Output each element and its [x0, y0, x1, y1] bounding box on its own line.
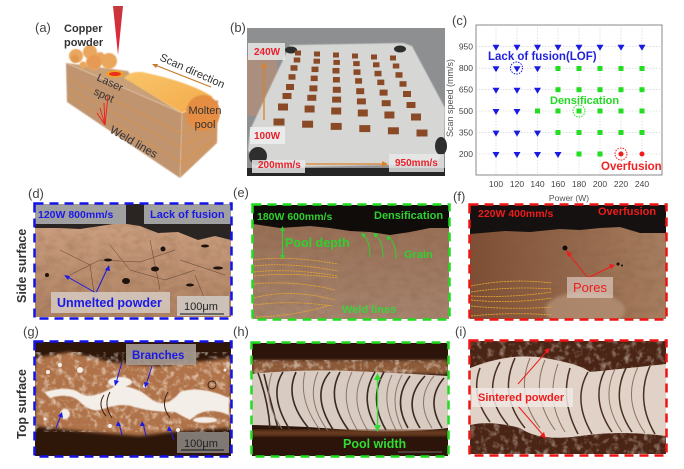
highlight circles: [510, 62, 627, 160]
power arrow: [263, 66, 265, 120]
x axis ticks: 200: [593, 179, 607, 189]
micro scale bar: [398, 451, 442, 453]
pointer arrows: [518, 351, 547, 435]
plate holes: [249, 46, 447, 165]
pool width label: Pool width: [343, 437, 406, 451]
x axis title: Power (W): [549, 193, 589, 203]
speed arrow: [306, 163, 383, 165]
laser beam: [113, 6, 123, 55]
dashed frame: [470, 340, 666, 456]
molten pool: [186, 95, 220, 131]
lack of fusion label: Lack of fusion(LOF): [488, 51, 597, 63]
green markers: densification: [535, 66, 644, 156]
powder label: powder: [64, 37, 104, 49]
panel: i sintered powder top surface: Sintered powder: [478, 392, 565, 404]
panel: d lack of fusion micrograph: Unmelted powder: [57, 296, 162, 310]
dashed frame: [34, 204, 232, 318]
printed samples: [274, 50, 428, 136]
x axis ticks: 220: [614, 179, 628, 189]
speed max label: [389, 154, 444, 172]
y axis ticks: 650: [459, 85, 473, 95]
dashed frame: [252, 204, 450, 320]
label g: (g): [23, 324, 39, 339]
panel: f overfusion micrograph: [453, 189, 666, 328]
state tag: [144, 204, 231, 224]
panel: h pool width top surface: [233, 324, 448, 456]
panel: g branches top surface: [23, 324, 232, 456]
micrograph: [35, 342, 231, 456]
panel: i sintered powder top surface: [455, 324, 666, 456]
weld lines label: Weld lines: [108, 124, 159, 161]
powder label: Copper: [64, 23, 103, 35]
condition text: 180W 600mm/s: [257, 211, 332, 223]
laser spot: [106, 70, 124, 78]
y axis ticks: [459, 42, 473, 159]
label f: (f): [453, 189, 465, 204]
speed min label: [252, 160, 305, 173]
base plate: [248, 43, 445, 168]
x axis ticks: 160: [551, 179, 565, 189]
state text: Overfusion: [598, 206, 656, 218]
x axis ticks: 100: [489, 179, 503, 189]
dashed frame: [252, 342, 448, 456]
label d: (d): [28, 186, 44, 201]
pool depth arrow: [282, 230, 284, 257]
grain arrows: [363, 235, 396, 259]
grain label: Grain: [404, 249, 433, 261]
micrograph: [252, 343, 448, 456]
pool depth label: Pool depth: [285, 236, 350, 250]
axes frame: [476, 25, 662, 175]
row label: top surface: Top surface: [15, 369, 29, 439]
y axis ticks: 800: [459, 63, 473, 73]
power max label: [248, 43, 285, 60]
label b: (b): [230, 20, 246, 35]
label a: (a): [35, 20, 51, 35]
scan arrow: [155, 65, 211, 87]
panel: b sample photograph: 100W: [254, 131, 281, 142]
y axis ticks: 950: [459, 42, 473, 52]
copper powder: [69, 45, 117, 70]
label h: (h): [233, 324, 249, 339]
condition tag: [35, 204, 126, 224]
molten pool label: Molten: [188, 105, 222, 117]
weld line traces: [254, 258, 338, 317]
weld line strokes: [67, 78, 217, 162]
label e: (e): [233, 185, 249, 200]
weld lines label: Weld lines: [342, 304, 396, 316]
scale bar: [177, 432, 229, 453]
pointer arrows: [66, 267, 108, 293]
x axis ticks: 240: [635, 179, 649, 189]
y axis title: Scan speed (mm/s): [445, 59, 455, 137]
micrograph: [253, 205, 449, 319]
panel: b sample photograph: 200mm/s: [258, 160, 301, 171]
sintered powder tag: [472, 388, 573, 407]
weld line traces: [471, 281, 552, 316]
unmelted powder tag: [51, 292, 170, 313]
block front face: [66, 63, 182, 178]
scale bar: [177, 296, 229, 316]
y axis ticks: 200: [459, 149, 473, 159]
panel: g branches top surface: Branches: [132, 350, 184, 362]
label i: (i): [455, 324, 467, 339]
table background: [247, 28, 445, 176]
branches tag: [126, 344, 196, 365]
pool width arrow: [376, 378, 378, 428]
block top face molten: [124, 72, 213, 113]
panel: a laser process schematic: [35, 6, 226, 178]
x axis ticks: 180: [572, 179, 586, 189]
panel: b sample photograph: [230, 20, 447, 176]
dashed frame: [34, 342, 232, 456]
y axis ticks: 350: [459, 128, 473, 138]
label c: (c): [452, 13, 467, 28]
micrograph: [470, 205, 666, 328]
panel: e densification micrograph: [233, 185, 450, 320]
panel: b sample photograph: 950mm/s: [395, 158, 438, 169]
panel: d lack of fusion micrograph: [28, 186, 232, 318]
x axis ticks: 120: [510, 179, 524, 189]
panel: b sample photograph: 240W: [254, 47, 281, 58]
micrograph: [35, 204, 231, 317]
panel: g branches top surface: 100μm: [184, 438, 218, 450]
laser text: Laser: [95, 72, 125, 94]
panel: f overfusion micrograph: Pores: [573, 280, 607, 295]
spot text: spot: [92, 86, 116, 106]
panel: d lack of fusion micrograph: 120W 800mm/s: [38, 209, 113, 221]
red markers: overfusion: [618, 152, 644, 156]
condition text: 220W 400mm/s: [478, 208, 553, 220]
branch arrows: [56, 362, 174, 440]
block end face: [180, 100, 218, 178]
x axis ticks: [489, 179, 649, 189]
row label: side surface: Side surface: [15, 229, 29, 303]
scan direction label: Scan direction: [158, 52, 226, 91]
molten pool label: pool: [195, 119, 215, 131]
densification label: Densification: [550, 95, 619, 107]
power min label: [250, 127, 285, 144]
pore arrows: [568, 253, 612, 278]
y axis ticks: 500: [459, 106, 473, 116]
blue markers: lack of fusion: [492, 45, 646, 158]
x axis ticks: 140: [530, 179, 545, 189]
grain arrows: [97, 96, 108, 125]
panel: d lack of fusion micrograph: Lack of fusion: [150, 209, 225, 221]
panel: d lack of fusion micrograph: 100μm: [184, 301, 218, 313]
overfusion label: Overfusion: [601, 161, 662, 173]
dashed frame: [470, 204, 666, 320]
pores tag: [567, 277, 613, 298]
panel: c process window chart: [445, 13, 662, 203]
micrograph: [470, 341, 666, 454]
block top face solid: [66, 63, 182, 113]
state text: Densification: [374, 210, 443, 222]
